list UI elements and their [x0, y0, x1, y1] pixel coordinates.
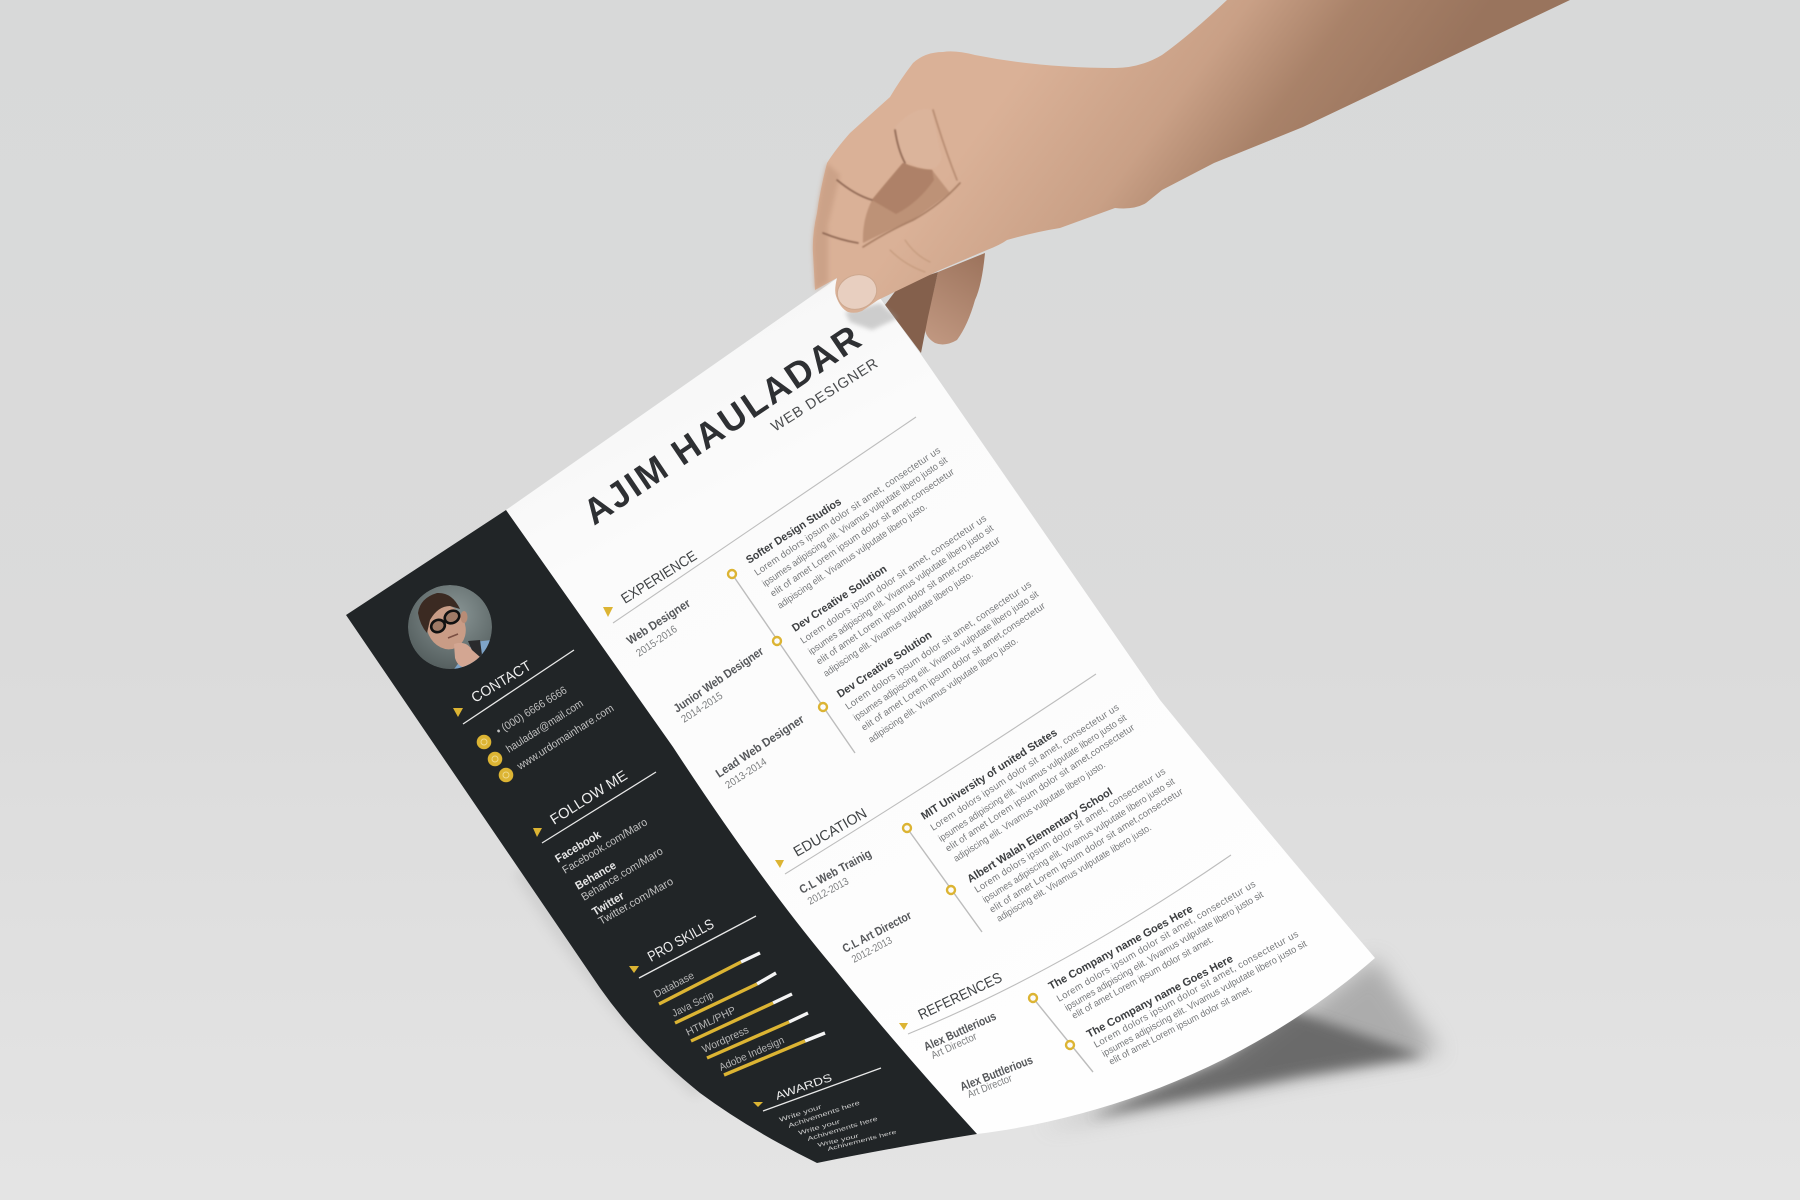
reference company two: The Company name Goes Here — [1085, 953, 1235, 1041]
job: dev creative solution second: Lorem dolors ipsum dolor sit amet, consectetur us — [844, 579, 1034, 712]
job: dev creative solution second: Dev Creative Solution — [835, 629, 934, 701]
awards list: Achivements here — [807, 1116, 879, 1143]
job roles and dates: Lead Web Designer — [713, 712, 807, 781]
job roles and dates: 2014-2015 — [679, 690, 725, 726]
school: mit: ipsumes adipiscing elit. Vivamus vulputate libero justo sit — [937, 712, 1129, 845]
job: dev creative solution second: ipsumes adipiscing elit. Vivamus vulputate libero justo sit — [851, 589, 1041, 723]
social links — [553, 816, 676, 928]
heading: experience: EXPERIENCE — [619, 548, 700, 607]
reference company two: elit of amet Lorem ipsum dolor sit amet. — [1107, 984, 1254, 1068]
job: softer design studios: ipsumes adipiscing elit. Vivamus vulputate libero justo sit — [760, 455, 950, 589]
section: follow me — [533, 768, 676, 928]
job roles and dates: 2013-2014 — [723, 756, 769, 792]
school: albert walah: Lorem dolors ipsum dolor sit amet, consectetur us — [973, 766, 1168, 896]
awards list: Write your — [798, 1119, 842, 1137]
section: pro skills — [629, 916, 825, 1075]
job roles and dates — [624, 596, 807, 792]
referees: Alex Buttlerious — [958, 1053, 1035, 1094]
job roles and dates: 2015-2016 — [634, 623, 680, 659]
back fingers holding the sheet — [885, 253, 985, 353]
referees: Art Director — [929, 1030, 979, 1062]
job: dev creative solution: Lorem dolors ipsum dolor sit amet, consectetur us — [799, 513, 989, 646]
social links: Twitter — [590, 890, 627, 919]
education roles: C.L Web Trainig — [797, 846, 874, 897]
reference company one: Lorem dolors ipsum dolor sit amet, consectetur us — [1055, 879, 1258, 1005]
contact details: hauladar@mail.com — [504, 698, 586, 756]
school: mit: Lorem dolors ipsum dolor sit amet, consectetur us — [929, 702, 1121, 834]
school: mit: adipiscing elit. Vivamus vulputate libero justo. — [952, 760, 1108, 865]
contact details: • (000) 6666 6666 — [494, 684, 569, 738]
job: softer design studios: elit of amet Lorem ipsum dolor sit amet,consectetur — [769, 466, 957, 599]
panel: dark sidebar — [346, 510, 977, 1163]
curled knuckle — [895, 109, 942, 168]
shadow: gap between curled finger and thumb — [863, 163, 950, 243]
skill bars — [652, 953, 825, 1075]
reference company two: ipsumes adipiscing elit. Vivamus vulputate libero justo sit — [1100, 938, 1309, 1060]
section: references — [899, 855, 1309, 1101]
section: experience — [603, 445, 1048, 792]
awards list: Write your — [778, 1102, 823, 1124]
education timeline — [903, 824, 982, 932]
referees: Alex Buttlerious — [921, 1009, 999, 1054]
contact details: www.urdomainhare.com — [514, 702, 616, 773]
school: mit: elit of amet Lorem ipsum dolor sit amet,consectetur — [944, 722, 1138, 855]
awards list — [778, 1098, 897, 1153]
paper shadow — [520, 870, 1440, 1128]
job: dev creative solution: Dev Creative Solution — [790, 563, 889, 635]
education roles: 2012-2013 — [806, 875, 851, 908]
skill bars: HTML/PHP — [684, 1004, 738, 1039]
hand and forearm — [813, 0, 1570, 315]
job roles and dates: Junior Web Designer — [671, 644, 766, 715]
school: albert walah: adipiscing elit. Vivamus vulputate libero justo. — [995, 822, 1154, 925]
awards list: Write your — [817, 1133, 860, 1149]
sheet base — [346, 265, 1375, 1163]
referees — [921, 1009, 1035, 1101]
job: softer design studios: adipiscing elit. Vivamus vulputate libero justo. — [775, 501, 929, 611]
section: education — [775, 674, 1186, 966]
job: dev creative solution second: adipiscing elit. Vivamus vulputate libero justo. — [866, 635, 1020, 745]
awards list: Achivements here — [787, 1098, 861, 1130]
heading: contact: CONTACT — [469, 658, 535, 706]
job: softer design studios: Lorem dolors ipsum dolor sit amet, consectetur us — [753, 445, 943, 578]
contact details — [494, 684, 616, 773]
education roles: C.L Art Director — [840, 908, 914, 956]
heading: education: EDUCATION — [791, 806, 870, 860]
resume sheet — [346, 265, 1375, 1163]
heading: awards: AWARDS — [774, 1071, 834, 1103]
education roles — [797, 846, 914, 966]
school: albert walah: Albert Walah Elementary School — [965, 786, 1115, 886]
social links: Behance — [574, 860, 618, 893]
referees: Art Director — [966, 1072, 1014, 1101]
deeper shadow inside the gap — [872, 163, 934, 214]
school: albert walah: ipsumes adipiscing elit. Vivamus vulputate libero justo sit — [981, 776, 1177, 906]
hand silhouette — [813, 0, 1570, 313]
heading: references: REFERENCES — [916, 970, 1005, 1024]
job: dev creative solution: ipsumes adipiscing elit. Vivamus vulputate libero justo sit — [806, 523, 996, 657]
awards list: Achivements here — [827, 1129, 897, 1153]
skill bars: Java Scrip — [670, 989, 716, 1020]
photo: portrait — [408, 585, 494, 672]
social links: Behance.com/Maro — [579, 845, 665, 904]
shaded finger side — [813, 163, 840, 290]
thumb shadow on paper — [845, 303, 898, 330]
job: softer design studios: Softer Design Studios — [744, 496, 844, 567]
subtitle: job title: WEB DESIGNER — [769, 356, 881, 435]
skill bars: Database — [652, 970, 696, 1001]
reference company one: elit of amet Lorem ipsum dolor sit amet. — [1070, 934, 1215, 1022]
heading: follow me: FOLLOW ME — [548, 768, 631, 828]
skill bars: Adobe Indesign — [717, 1034, 786, 1074]
social links: Facebook.com/Maro — [560, 816, 650, 877]
job: dev creative solution: elit of amet Lorem ipsum dolor sit amet,consectetur — [815, 534, 1003, 667]
job roles and dates: Web Designer — [624, 596, 693, 648]
section: awards — [753, 1068, 897, 1153]
job: dev creative solution: adipiscing elit. Vivamus vulputate libero justo. — [821, 569, 975, 679]
triangle marker — [453, 708, 463, 717]
skill bars: Wordpress — [700, 1024, 751, 1056]
references timeline — [1029, 994, 1093, 1072]
contact icons — [477, 735, 513, 782]
social links: Facebook — [553, 829, 604, 866]
school: albert walah: elit of amet Lorem ipsum dolor sit amet,consectetur — [988, 786, 1186, 916]
title: name: AJIM HAULADAR — [576, 317, 868, 533]
finger creases — [823, 110, 960, 272]
section: contact — [453, 650, 616, 782]
experience timeline — [728, 570, 855, 753]
heading: pro skills: PRO SKILLS — [645, 916, 717, 966]
school: mit: MIT University of united States — [919, 727, 1060, 823]
reference company one: The Company name Goes Here — [1047, 903, 1195, 993]
reference company one: ipsumes adipiscing elit. Vivamus vulputate libero justo sit — [1063, 889, 1266, 1014]
thumbnail — [832, 269, 882, 315]
reference company two: Lorem dolors ipsum dolor sit amet, consectetur us — [1092, 929, 1301, 1051]
job: dev creative solution second: elit of amet Lorem ipsum dolor sit amet,consectetur — [860, 600, 1048, 733]
social links: Twitter.com/Maro — [597, 876, 676, 928]
education roles: 2012-2013 — [850, 935, 894, 966]
